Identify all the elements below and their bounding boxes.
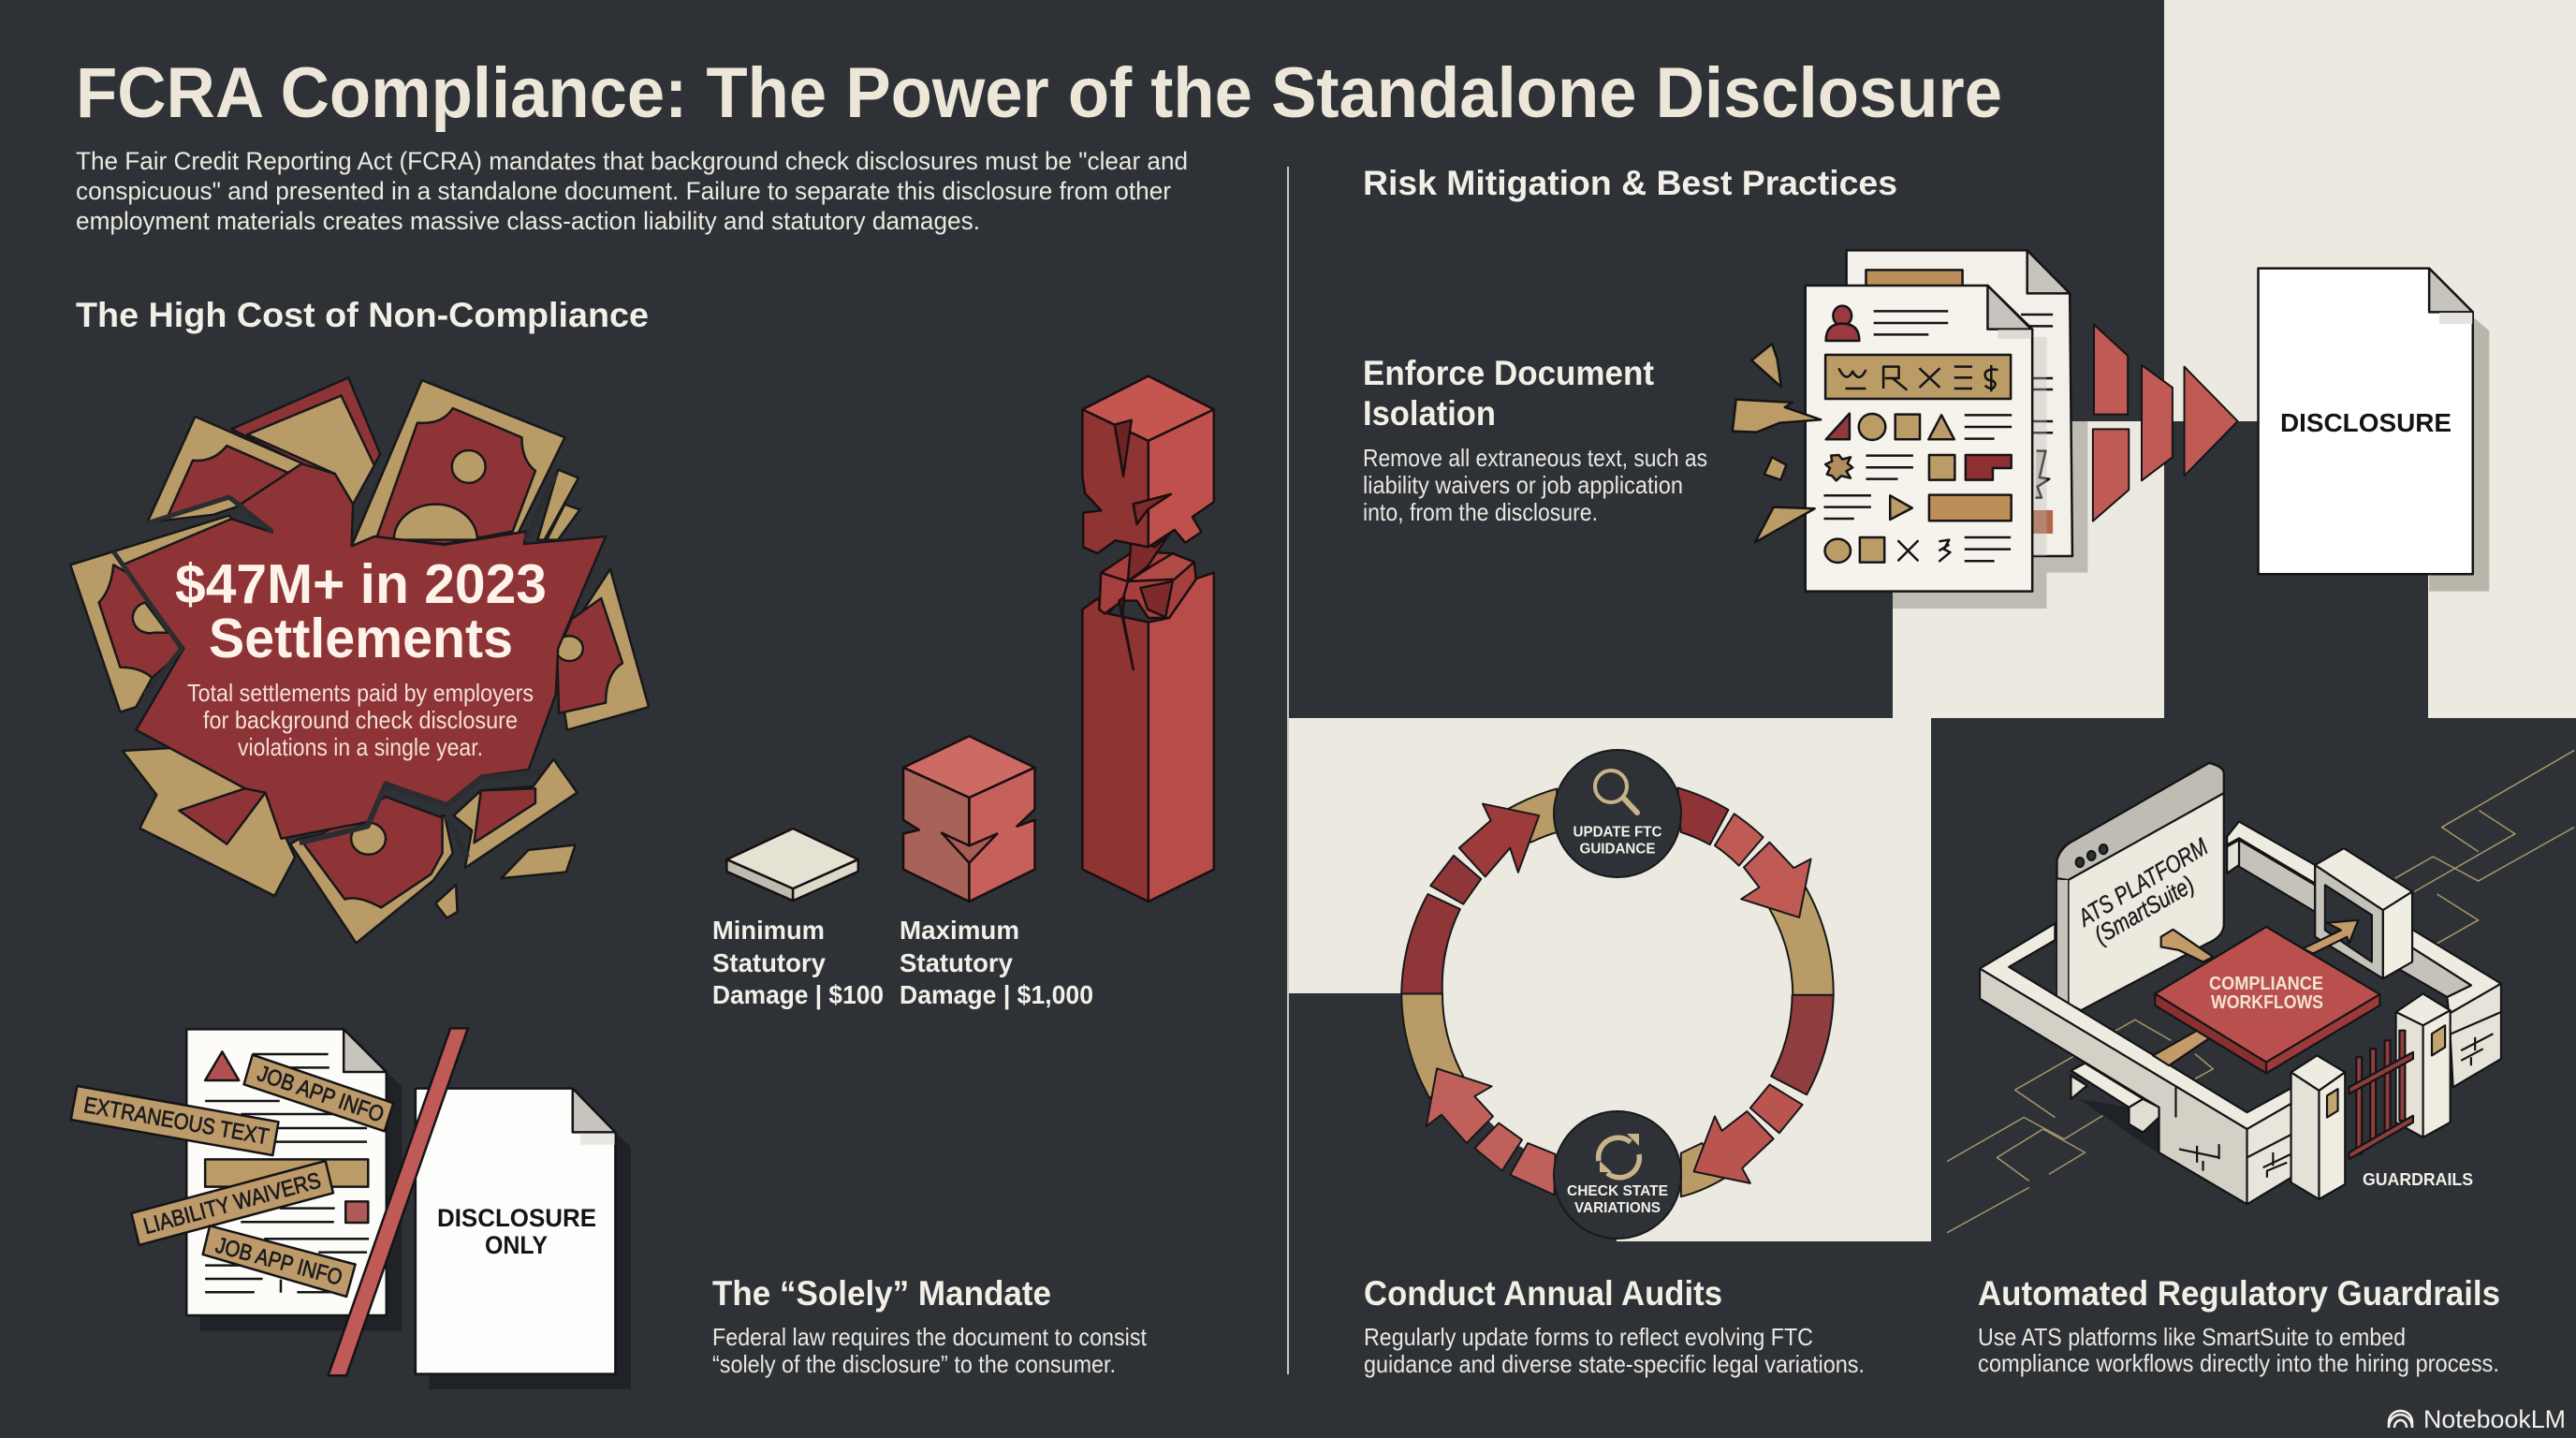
circuit lines [1947, 750, 2574, 1233]
label: ats platform: ATS PLATFORM [2071, 832, 2213, 932]
isometric illustration [1947, 750, 2574, 1233]
text block: automated regulatory guardrails: compliance workflows directly into the hiring process. [1978, 1349, 2499, 1377]
documents and strike bar [71, 1028, 631, 1389]
ring segments and arrows [1401, 787, 1834, 1196]
node: check state variations: CHECK STATE [1567, 1183, 1668, 1199]
text block: enforce document isolation: into, from the disclosure. [1363, 498, 1598, 526]
text block: conduct annual audits: Conduct Annual Audits [1364, 1274, 1722, 1313]
label: compliance workflows: WORKFLOWS [2211, 992, 2323, 1013]
arrow: top left [1459, 804, 1539, 876]
maximum bar: cube [903, 736, 1034, 902]
text block: the solely mandate: “solely of the disclosure” to the consumer. [712, 1350, 1116, 1378]
strike bar [329, 1028, 468, 1375]
text block: enforce document isolation: Remove all extraneous text, such as [1363, 444, 1707, 472]
text block: conduct annual audits: Regularly update forms to reflect evolving FTC [1364, 1323, 1813, 1351]
label: minimum statutory damage [712, 916, 884, 1009]
node: update ftc guidance: UPDATE FTC [1573, 824, 1662, 841]
intro paragraph: The Fair Credit Reporting Act (FCRA) mandates that background check disclosures must be "clear and [76, 147, 1188, 175]
node: check state variations: VARIATIONS [1574, 1200, 1661, 1216]
label: minimum statutory damage: Damage | $100 [712, 980, 884, 1009]
label: compliance workflows: COMPLIANCE [2209, 974, 2323, 994]
tag: extraneous text: EXTRANEOUS TEXT [81, 1093, 271, 1150]
icon: torn dollar bills [70, 377, 649, 943]
label: minimum statutory damage: Minimum [712, 916, 825, 945]
intro paragraph [76, 147, 1188, 235]
clean disclosure page [2259, 269, 2489, 592]
disclosure only label [437, 1204, 596, 1259]
text block: the solely mandate [712, 1274, 1148, 1378]
text block: enforce document isolation: Isolation [1363, 394, 1496, 433]
panel: cluttered document versus standalone disclosure [71, 1028, 631, 1389]
node: update ftc guidance: GUIDANCE [1580, 841, 1655, 858]
label: maximum statutory damage: Statutory [900, 948, 1013, 977]
gate frame [2315, 848, 2412, 978]
front gate pillar [2291, 1055, 2345, 1199]
heading: risk mitigation and best practices: Risk Mitigation & Best Practices [1363, 164, 1897, 202]
label: maximum statutory damage: Maximum [900, 916, 1019, 945]
settlement figure [175, 553, 547, 669]
text block: enforce document isolation: Enforce Document [1363, 354, 1654, 392]
rear gate pillar [2396, 993, 2451, 1137]
arrow: bottom left [1427, 1068, 1493, 1143]
minimum bar: flat slab [726, 829, 858, 901]
arrow: bottom right [1694, 1111, 1774, 1183]
text block: the solely mandate: Federal law requires the document to consist [712, 1323, 1148, 1351]
disclosure only label: DISCLOSURE [437, 1204, 596, 1232]
back walls [2227, 821, 2501, 1087]
standalone disclosure page [416, 1089, 615, 1374]
text block: enforce document isolation: liability waivers or job application [1363, 471, 1683, 499]
panel: automated guardrails isometric fort [1947, 750, 2574, 1233]
settlement figure: Settlements [209, 608, 513, 669]
front document [1806, 286, 2032, 592]
document stack, shards, arrows [1733, 250, 2489, 609]
text block: automated regulatory guardrails: Automated Regulatory Guardrails [1978, 1274, 2500, 1313]
icon: refresh arrows [1599, 1134, 1639, 1178]
heading: the high cost of non-compliance: The High Cost of Non-Compliance [76, 296, 649, 334]
icon: notebooklm mark [2389, 1411, 2412, 1428]
label: ats platform: (SmartSuite) [2089, 870, 2199, 949]
label: ats platform [2071, 832, 2213, 949]
label: compliance workflows [2209, 974, 2323, 1013]
disclosure only label: ONLY [485, 1231, 548, 1259]
panel: annual audit cycle ring [1401, 750, 1834, 1239]
panel: document isolation illustration [1733, 250, 2489, 609]
gate fence [2349, 1031, 2413, 1159]
text block: enforce document isolation [1363, 354, 1707, 526]
text block: automated regulatory guardrails: Use ATS platforms like SmartSuite to embed [1978, 1323, 2406, 1351]
class-action bar: broken tower [1082, 376, 1214, 902]
tag: job app info top: JOB APP INFO [254, 1061, 387, 1128]
compliance platform [2155, 927, 2379, 1073]
back document [1847, 250, 2072, 556]
chart: statutory damage isometric bars [712, 376, 1214, 1009]
settlement description: for background check disclosure [203, 706, 518, 734]
title: FCRA Compliance: The Power of the Standalone Disclosure [76, 53, 2002, 133]
settlement description: Total settlements paid by employers [187, 679, 534, 707]
front walls [1980, 923, 2305, 1204]
text block: conduct annual audits: guidance and diverse state-specific legal variations. [1364, 1350, 1865, 1378]
text block: automated regulatory guardrails [1978, 1274, 2500, 1377]
watermark: notebooklm logo: NotebookLM [2423, 1405, 2566, 1433]
settlement description [187, 679, 534, 761]
panel: shattered money settlement graphic [70, 377, 649, 943]
ats browser window [2057, 763, 2224, 1010]
bars [726, 376, 1214, 902]
arrow: top right [1741, 843, 1811, 917]
node: check state variations [1554, 1111, 1681, 1239]
background colour blocks [1288, 0, 2576, 1241]
label: maximum statutory damage: Damage | $1,000 [900, 980, 1093, 1009]
node: update ftc guidance [1554, 750, 1681, 877]
settlement figure: $47M+ in 2023 [175, 553, 547, 615]
icon: magnifying glass [1595, 770, 1637, 813]
arrow to disclosure [2093, 325, 2238, 521]
tag: job app info bottom: JOB APP INFO [212, 1233, 345, 1291]
text block: conduct annual audits [1364, 1274, 1865, 1378]
intro paragraph: employment materials creates massive class-action liability and statutory damages. [76, 207, 980, 235]
label: minimum statutory damage: Statutory [712, 948, 826, 977]
label: guardrails: GUARDRAILS [2363, 1170, 2473, 1189]
support bracket [2071, 1064, 2159, 1133]
tag: liability waivers: LIABILITY WAIVERS [140, 1167, 324, 1240]
settlement description: violations in a single year. [238, 733, 483, 761]
label: maximum statutory damage [900, 916, 1093, 1009]
intro paragraph: conspicuous" and presented in a standalone document. Failure to separate this disclosure from other [76, 177, 1171, 205]
disclosure label: DISCLOSURE [2280, 408, 2452, 437]
cluttered document [186, 1029, 387, 1315]
text block: the solely mandate: The “Solely” Mandate [712, 1274, 1051, 1313]
workflow arrows [2153, 920, 2358, 1065]
torn shards [1733, 344, 1821, 542]
